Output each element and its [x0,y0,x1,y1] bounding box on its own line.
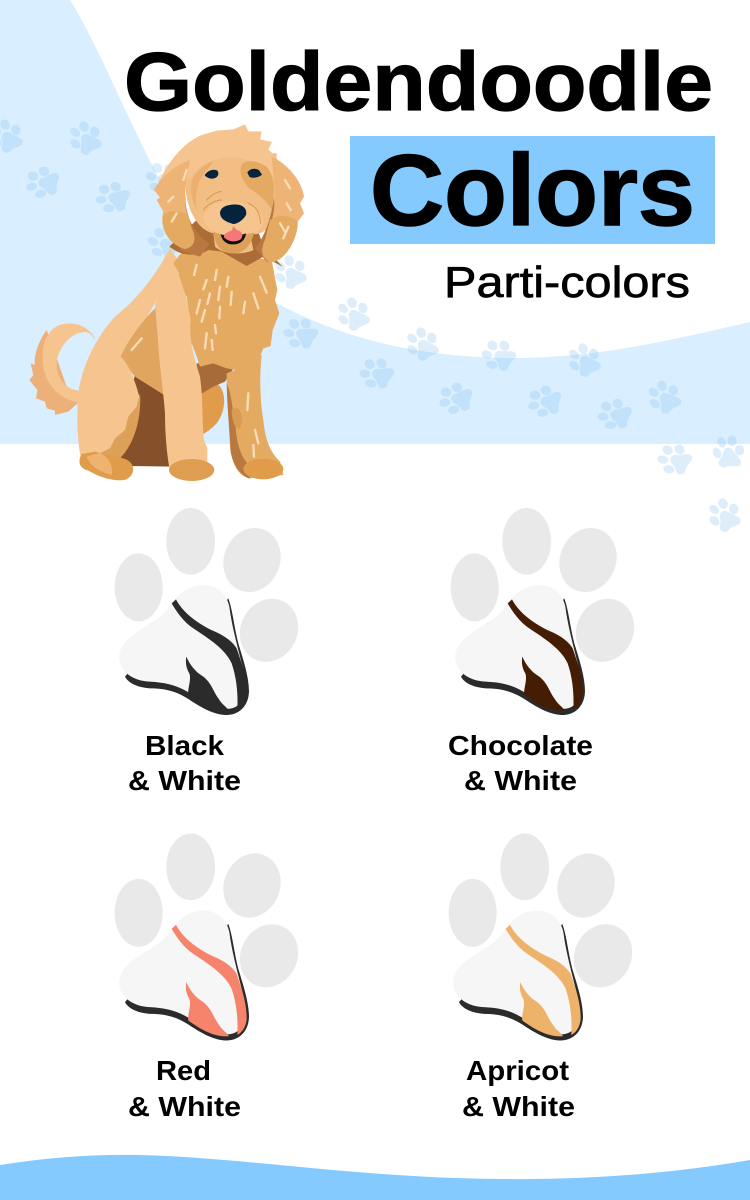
paw: hind [79,452,133,480]
label [462,1055,575,1122]
left ear shadow [180,187,209,257]
paw: Chocolate & White [448,508,645,796]
label [128,730,241,796]
hind paw highlight [87,453,112,475]
paw: Black & White [115,508,309,796]
fur highlights and strokes [132,170,291,457]
label [448,730,593,796]
brow patch [241,161,274,210]
right eye [247,169,262,178]
crown [157,124,285,187]
background: light blue wave [0,0,750,444]
label: Chocolate [448,730,593,761]
toes and pad [451,508,645,715]
right ear lower tone [262,216,298,262]
title highlight box with Colors: Colors [370,135,695,247]
dark neck shadow [169,217,283,267]
head base [185,150,277,253]
haunch fur shadow [100,393,140,458]
belly tone [121,307,167,397]
label: & White [128,1091,241,1122]
nose [220,205,246,224]
shadow between legs [120,373,173,467]
illustration: goldendoodle dog [29,124,304,481]
body and haunch [77,248,187,462]
toes and pad [115,508,309,715]
left ear [154,160,194,249]
label: Red [156,1055,211,1086]
left brow patch [191,162,213,210]
label: Apricot [466,1055,569,1086]
toes and pad [115,833,309,1041]
far leg shadow [227,383,250,479]
label: & White [462,1091,575,1122]
left ear lower tone [163,211,194,249]
far hind leg [197,383,224,437]
bottom wave [0,1155,750,1200]
label: & White [464,765,577,796]
chin [213,228,255,253]
paw: Red & White [115,833,309,1122]
subtitle: Parti-colors: Parti-colors [444,258,690,307]
toes and pad [449,833,643,1041]
label: Black [145,730,224,761]
label: & White [128,765,241,796]
front leg far [227,355,283,478]
title: Goldendoodle: Goldendoodle [124,35,713,128]
left eye [205,170,218,179]
paw: Apricot & White [449,833,643,1122]
decorative paw prints trail [0,112,750,537]
right ear [262,157,304,262]
label [128,1055,241,1122]
paw: far front [243,459,283,479]
tongue [224,226,242,241]
mouth [221,233,246,244]
muzzle [203,201,263,234]
chest fur [173,247,279,370]
dog tail [29,323,94,415]
paw: near front [169,459,214,481]
right ear shadow [255,197,277,262]
front leg near [155,268,207,472]
far leg highlight [232,408,242,429]
